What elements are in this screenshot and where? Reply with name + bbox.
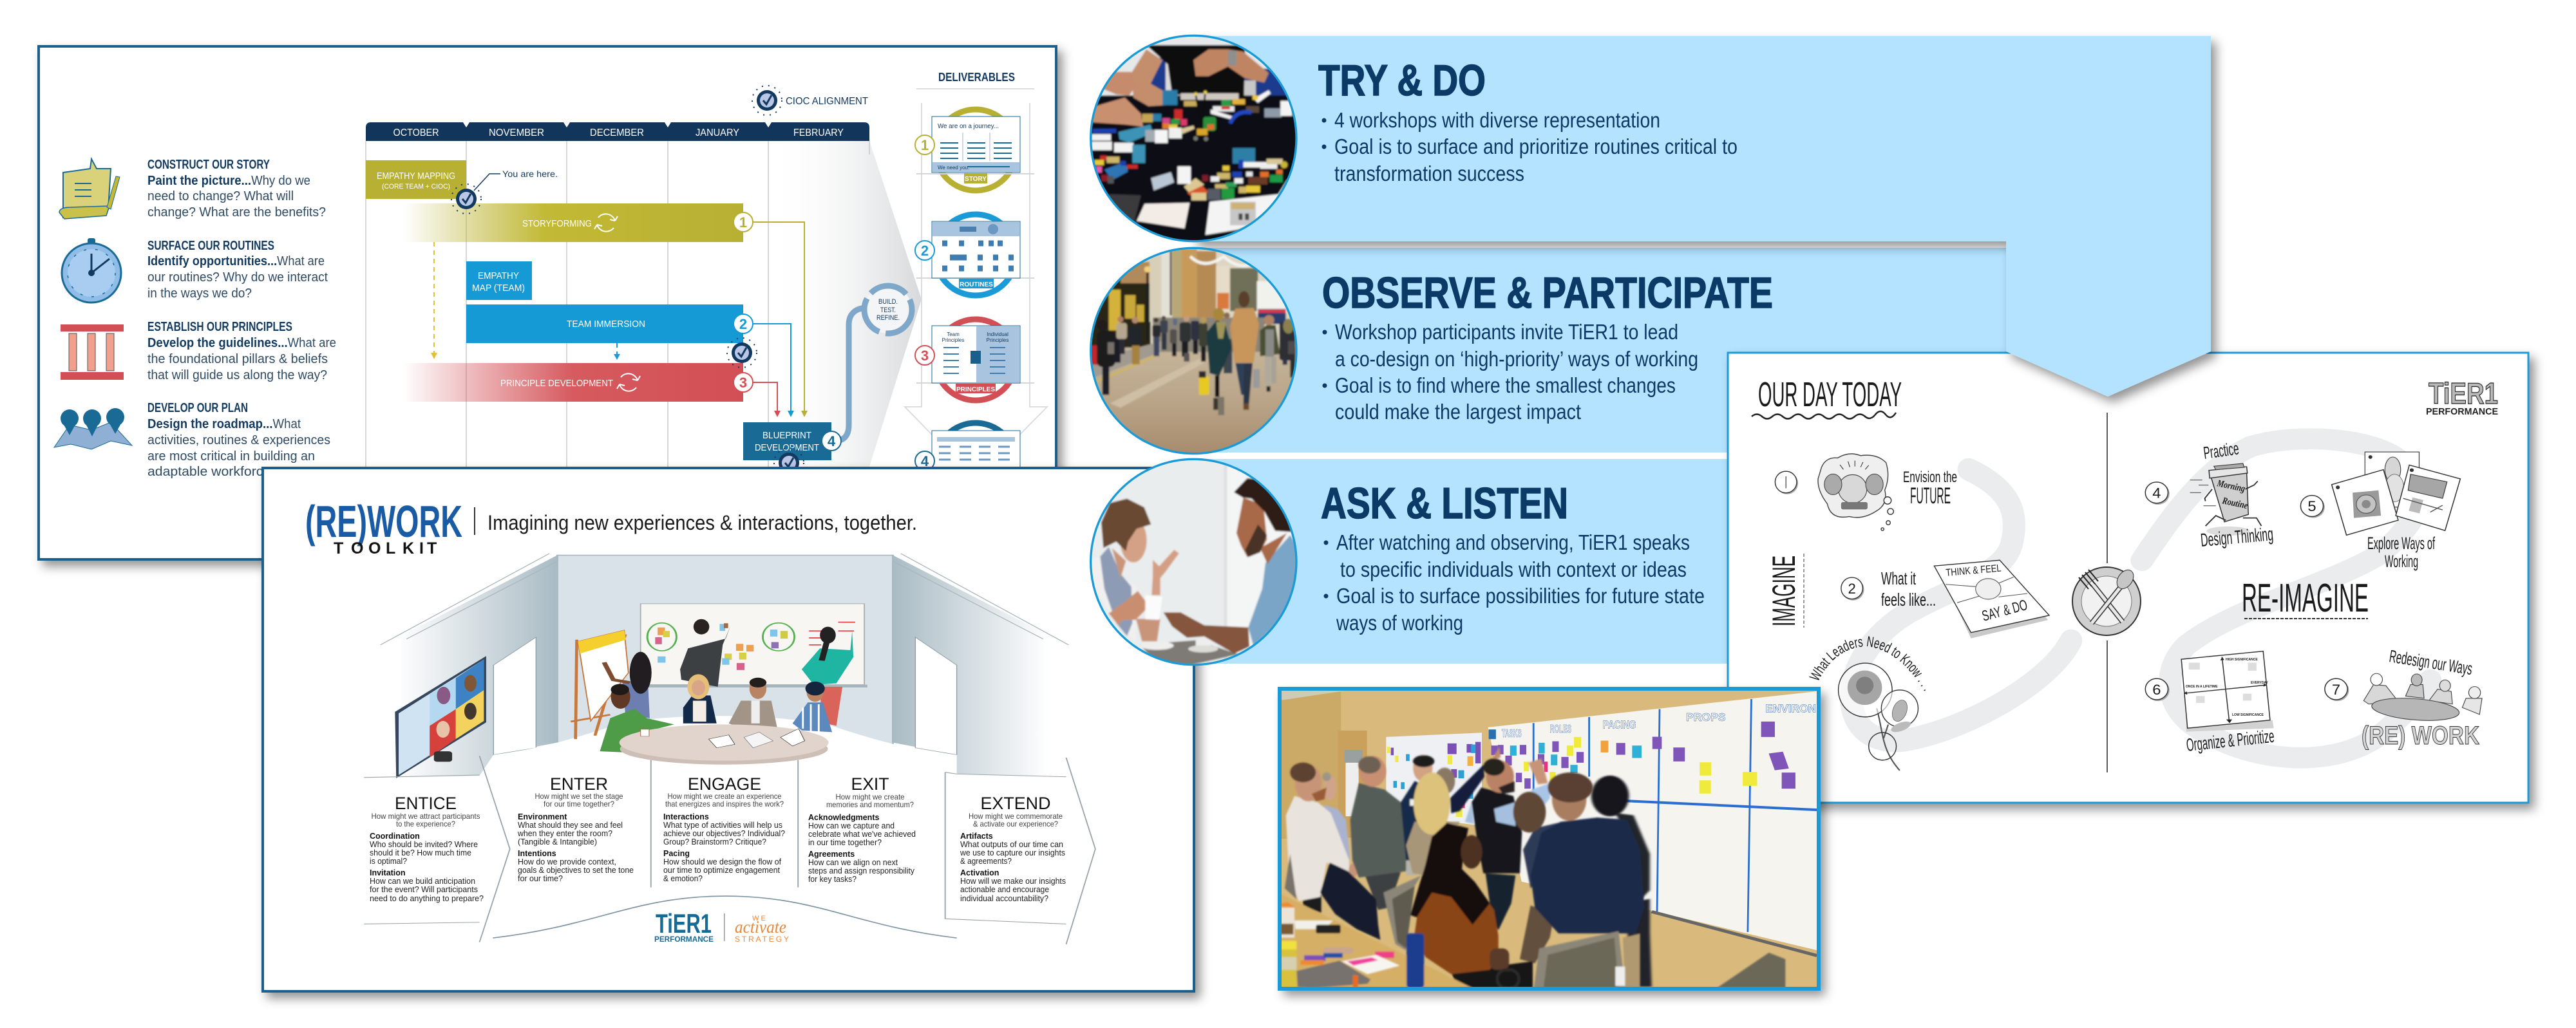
icon: rose (1839, 663, 1918, 771)
panel: workshop photo (1278, 687, 1820, 990)
chart: month column lines (366, 141, 869, 467)
section: enter: (Tangible & Intangible) (518, 837, 597, 846)
section: extend: we use to capture our insights (960, 848, 1065, 857)
cycle: build test refine: BUILD. (878, 298, 898, 306)
bullets: observe and participate: Goal is to find where the smallest changes (1335, 373, 1676, 397)
section: extend (960, 794, 1066, 903)
table (620, 724, 828, 765)
section: engage: Interactions (663, 812, 709, 821)
person: grey-haired arm raised (1434, 747, 1501, 813)
icon: crystal ball in thought cloud (1818, 454, 1893, 530)
photo background: wall and whiteboards (1280, 689, 1818, 989)
chart header: months: OCTOBER (393, 127, 439, 138)
text block: develop our plan (147, 401, 330, 479)
badge: cioc check february (774, 448, 804, 478)
cycle: build test refine: TEST. (880, 306, 896, 314)
text block: establish our principles: Develop the guidelines...What are (147, 336, 336, 350)
text: matrix labels: LOW SIGNIFICANCE (2232, 713, 2264, 717)
text: explore ways of working: Explore Ways of (2367, 534, 2435, 553)
number 6: 6 (2152, 682, 2161, 698)
cycle: build test refine: REFINE. (876, 314, 900, 322)
icon: stopwatch (62, 238, 121, 303)
person: seated woman in rust top (1410, 823, 1533, 988)
callout: you are here: You are here. (502, 169, 558, 179)
section: entice: Coordination (370, 832, 420, 841)
sketches: cup, cards, matrix, table (2145, 452, 2482, 732)
number 4 (2145, 482, 2170, 505)
text block: construct our story (147, 158, 326, 220)
logo: tier1 performance: WE (752, 915, 768, 922)
legend: cioc alignment (752, 86, 868, 115)
card: principles deliverable: Individual (987, 332, 1009, 337)
section: extend: EXTEND (980, 794, 1051, 813)
section: engage: & emotion? (663, 874, 703, 883)
box: blueprint development: BLUEPRINT (762, 430, 811, 441)
section: entice: for the event? Will participants (370, 885, 478, 894)
section: enter: for our time? (518, 874, 563, 883)
section: engage: ENGAGE (688, 774, 761, 794)
number badges: 1 to 4: 3 (739, 375, 747, 391)
card: blueprint deliverable (915, 423, 1020, 504)
box: blueprint development: DEVELOPMENT (755, 442, 819, 453)
arrows: dashed dependencies (434, 242, 617, 355)
section: engage (663, 774, 785, 883)
section: extend: Activation (960, 868, 999, 877)
section: exit: celebrate what we've achieved (808, 830, 916, 839)
text: matrix labels: HIGH SIGNIFICANCE (2226, 658, 2258, 662)
text block: surface our routines: SURFACE OUR ROUTINES (147, 239, 274, 253)
section: exit (808, 774, 916, 884)
bar: storyforming: STORYFORMING (522, 218, 592, 229)
number badges: 1 to 4: 2 (739, 316, 747, 332)
heading: deliverables: DELIVERABLES (938, 71, 1015, 84)
text: explore ways of working (2367, 534, 2435, 571)
card: principles deliverable: Principles (942, 337, 964, 343)
photo frame (1280, 689, 1819, 989)
section: enter: ENTER (550, 774, 608, 794)
logo: tier1 performance (654, 908, 789, 944)
chevron: wedge toward deliverables (836, 141, 921, 467)
whiteboard headings: TASKS (1502, 727, 1522, 740)
text: what it feels like (1881, 568, 1936, 610)
icon: running coffee cup (2190, 463, 2262, 536)
chart header: months: DECEMBER (590, 127, 644, 138)
text: morning routine on cup: Routine (2221, 496, 2249, 511)
room walls (381, 554, 1068, 778)
bar: empathy mapping (366, 160, 466, 199)
section: entice: should it be? How much time (370, 848, 471, 857)
label: imagine: IMAGINE (1766, 556, 1802, 626)
card: principles deliverable: PRINCIPLES (956, 386, 995, 393)
whiteboard headings: ENVIRON (1765, 702, 1816, 715)
text block: develop our plan: adaptable workforce? (147, 465, 278, 479)
section: extend: How might we commemorate (969, 812, 1063, 821)
logo: tier1 performance: STRATEGY (735, 935, 789, 944)
section: engage: achieve our objectives? Individual? (663, 829, 785, 838)
text: think feel say do (1946, 563, 2029, 624)
sketches: crystal ball, paper, rose (1775, 453, 2050, 771)
bullets: try and do (1321, 108, 1738, 185)
section: engage: Pacing (663, 849, 690, 858)
label: what leaders need to know: What Leaders Need to Know . . . (1809, 636, 1926, 691)
text block: develop our plan: Design the roadmap...What (147, 417, 301, 431)
text block: establish our principles: ESTABLISH OUR PRINCIPLES (147, 320, 292, 334)
text block: construct our story: CONSTRUCT OUR STORY (147, 158, 270, 172)
number 1 (1775, 471, 1798, 494)
text: morning routine on cup: Morning (2215, 478, 2246, 494)
card: routines deliverable (915, 214, 1034, 295)
panel: rework toolkit (263, 468, 1194, 991)
bar: principle development: PRINCIPLE DEVELOPMENT (500, 378, 613, 389)
person: man in black vest (1465, 758, 1522, 930)
bar: empathy mapping: EMPATHY MAPPING (377, 171, 455, 182)
box: empathy map team (466, 261, 532, 300)
arrowheads: bars to blueprint (774, 411, 808, 417)
text: practice: Practice (2202, 439, 2240, 463)
number 2: 2 (1848, 581, 1856, 597)
section: entice (370, 794, 484, 903)
section: enter: How might we set the stage (535, 792, 623, 801)
section: enter: for our time together? (544, 799, 614, 808)
bullets: observe and participate: could make the largest impact (1335, 400, 1581, 424)
logo: rework sketch: (RE) WORK (2362, 722, 2479, 750)
logo: rework toolkit: (RE)WORK (305, 496, 462, 547)
logo: tier1 sketch: TiER1 (2429, 377, 2498, 410)
section: entice: to the experience? (396, 819, 455, 828)
section: extend: & agreements? (960, 857, 1012, 866)
bar: storyforming (403, 203, 743, 242)
bullets: try and do: transformation success (1334, 162, 1524, 185)
whiteboard headings: ROLES (1549, 723, 1571, 736)
person: man in green sweater (600, 684, 674, 753)
section: extend: individual accountability? (960, 894, 1048, 903)
photo circle: two people talking (1088, 456, 1301, 668)
section: engage: our time to optimize engagement (663, 866, 781, 875)
chart header: months: JANUARY (696, 127, 739, 138)
text: what it feels like: feels like... (1881, 590, 1936, 610)
number 6 (2145, 678, 2170, 701)
bullets: try and do: Goal is to surface and prioritize routines critical to (1334, 135, 1738, 158)
box: blueprint development (743, 422, 831, 460)
text block: develop our plan: are most critical in building an (147, 449, 315, 463)
whiteboard surfaces (1488, 691, 1817, 956)
logo: tier1 sketch: PERFORMANCE (2426, 406, 2498, 417)
card: story deliverable: We need you. (938, 165, 969, 171)
heading: re-imagine: RE-IMAGINE (2242, 576, 2369, 621)
whiteboard headings: PROPS (1686, 711, 1726, 724)
heading: observe and participate: OBSERVE & PARTICIPATE (1322, 268, 1773, 317)
sticky notes (1492, 722, 1795, 794)
photo circle: busy street (1088, 245, 1301, 457)
person: standing man at board (680, 619, 730, 687)
box: empathy map team: EMPATHY (478, 270, 519, 281)
section: entice: Who should be invited? Where (370, 840, 478, 849)
number 5 (2300, 496, 2325, 518)
connector: blueprint to build test refine (835, 308, 866, 441)
column: deliverables arrow outline (905, 89, 1047, 480)
logo: rework toolkit: TOOLKIT (334, 539, 437, 557)
section: entice: Invitation (370, 868, 406, 877)
section: enter: goals & objectives to set the tone (518, 866, 634, 875)
number 5: 5 (2307, 498, 2316, 514)
person: man in grey fleece (1350, 756, 1412, 910)
text: envision the future (1903, 469, 1957, 509)
text block: construct our story: need to change? What will (147, 189, 294, 203)
section: exit: memories and momentum? (826, 800, 914, 809)
icon: ways of working cards (2332, 452, 2460, 535)
section: engage: Group? Brainstorm? Critique? (663, 837, 766, 846)
text: design thinking: Design Thinking (2200, 524, 2274, 551)
entice and extend chevrons and dividers (364, 756, 1095, 944)
text: envision the future: FUTURE (1910, 483, 1951, 509)
number 4: 4 (2152, 485, 2161, 501)
number badges: 1 to 4: 4 (828, 433, 836, 449)
section: exit: Agreements (808, 850, 855, 859)
panel: roadmap process chart (39, 46, 1056, 559)
bullets: ask and listen: ways of working (1336, 611, 1463, 635)
number 2 (1841, 577, 1864, 601)
section: enter: What should they see and feel (518, 821, 623, 830)
text block: develop our plan: activities, routines & experiences (147, 433, 330, 447)
video conference screen (395, 656, 486, 778)
panel: try and do banner with arrow (1193, 36, 2211, 397)
icon: think feel say do paper (1934, 560, 2049, 639)
card: story deliverable (915, 109, 1034, 191)
text block: construct our story: change? What are the benefits? (147, 205, 326, 220)
card: story deliverable: STORY (965, 176, 987, 183)
section: entice: How might we attract participants (371, 812, 480, 821)
person: man with glasses (729, 678, 777, 729)
card: principles deliverable: Principles (987, 337, 1009, 343)
whiteboard headings (1502, 702, 1816, 740)
bullets: ask and listen: Goal is to surface possibilities for future state (1336, 584, 1705, 608)
badge: cioc check october (451, 184, 481, 214)
icon: people at rework table (2363, 673, 2482, 724)
photo foreground: people, chairs, table (1280, 747, 1785, 988)
text: matrix labels (2186, 658, 2269, 717)
box: empathy map team: MAP (TEAM) (472, 283, 525, 294)
easel (571, 630, 629, 739)
text: morning routine on cup (2215, 478, 2249, 511)
section: exit: How might we create (836, 792, 905, 801)
section: entice: How can we build anticipation (370, 877, 475, 886)
section: enter: Intentions (518, 849, 556, 858)
text block: establish our principles: the foundational pillars & beliefs (147, 352, 328, 366)
section: entice: is optimal? (370, 857, 407, 866)
logo: rework toolkit (305, 496, 475, 557)
text: think feel say do: THINK & FEEL (1946, 563, 2002, 579)
section: enter: Environment (518, 812, 567, 821)
swirl: right infinity loop (2142, 439, 2430, 758)
bullets: ask and listen: to specific individuals with context or ideas (1340, 557, 1687, 581)
label: imagine (1766, 554, 1804, 628)
heading: ask and listen: ASK & LISTEN (1321, 479, 1568, 528)
section: exit: Acknowledgments (808, 813, 879, 822)
text block: surface our routines: Identify opportunities...What are (147, 254, 325, 268)
text: think feel say do: SAY & DO (1980, 596, 2029, 624)
section: exit: in our time together? (808, 838, 882, 847)
person: woman with short brown hair (1513, 792, 1563, 888)
person: man in white shirt (1286, 763, 1358, 913)
bullets: ask and listen: After watching and observing, TiER1 speaks (1336, 530, 1690, 554)
section: entice: need to do anything to prepare? (370, 894, 484, 903)
chart header: months (366, 122, 869, 141)
logo: tier1 sketch (2426, 377, 2498, 417)
section: enter: How do we provide context, (518, 857, 616, 866)
whiteboard (638, 604, 867, 687)
bullets: ask and listen (1324, 530, 1705, 635)
section: extend: How will we make our insights (960, 877, 1066, 886)
card: blueprint deliverable: 4 (921, 453, 929, 469)
section: engage: What type of activities will help us (663, 821, 782, 830)
number 7 (2325, 678, 2349, 701)
bar: empathy mapping: (CORE TEAM + CIOC) (382, 183, 450, 191)
section: engage: How might we create an experience (667, 792, 782, 801)
section: exit: steps and assign responsibility (808, 866, 915, 875)
section: exit: How can we capture and (808, 821, 895, 830)
number badges: 1 to 4: 1 (739, 214, 747, 230)
bullets: observe and participate (1323, 320, 1698, 424)
wall charts (1386, 733, 1482, 826)
logo: tier1 performance: PERFORMANCE (654, 936, 714, 944)
cycle: build test refine (864, 286, 912, 333)
card: story deliverable: We are on a journey... (938, 122, 999, 130)
whiteboard headings: PACING (1603, 718, 1636, 731)
logo: tier1 performance: TiER1 (656, 908, 712, 939)
card: routines deliverable: ROUTINES (960, 281, 993, 288)
person: blonde woman (1406, 772, 1460, 875)
callout: you are here (474, 169, 558, 191)
card: principles deliverable: 3 (921, 348, 929, 364)
person: blonde woman (683, 674, 717, 724)
card: principles deliverable (915, 319, 1034, 400)
card: principles deliverable: Team (947, 332, 960, 337)
bar: principle development (403, 363, 743, 402)
text: what it feels like: What it (1881, 568, 1916, 588)
swirl: left infinity loop (1852, 469, 2071, 741)
panel: ask and listen banner (1193, 459, 2006, 664)
person: young man in navy sweater (1520, 772, 1644, 988)
table and objects (1280, 893, 1519, 988)
person: woman with teal top (802, 627, 853, 726)
text block: establish our principles (147, 320, 336, 382)
text block: develop our plan: DEVELOP OUR PLAN (147, 401, 248, 415)
icon: story scroll (59, 159, 120, 219)
arrows: bars to blueprint (752, 222, 804, 412)
photo circle: hands building with lego (1088, 32, 1301, 246)
bullets: try and do: 4 workshops with diverse representation (1334, 108, 1660, 132)
person: man in navy back (1401, 755, 1434, 875)
text block: surface our routines: in the ways we do? (147, 286, 252, 301)
person: woman striped shirt (793, 682, 832, 732)
section: exit: for key tasks? (808, 875, 857, 884)
icon: map with pins (54, 408, 132, 449)
section: extend: What outputs of our time can (960, 840, 1063, 849)
text block: surface our routines (147, 239, 328, 301)
card: routines deliverable: 2 (921, 243, 929, 259)
person: woman with long dark hair (1591, 776, 1652, 987)
icon: pillars (61, 324, 124, 380)
floor (493, 716, 957, 778)
chairs and jacket (1285, 854, 1785, 988)
heading: our day today (1752, 375, 1902, 418)
bar: team immersion (466, 304, 743, 343)
number 7: 7 (2332, 682, 2340, 698)
heading: tagline: Imagining new experiences & interactions, together. (488, 511, 917, 534)
section: exit: EXIT (851, 774, 889, 794)
section: engage: that energizes and inspires the work? (665, 799, 784, 808)
panel: observe and participate banner (1193, 248, 2006, 453)
section: extend: actionable and encourage (960, 885, 1049, 894)
section: exit: How can we align on next (808, 858, 898, 867)
number badges: 1 to 4 (734, 212, 841, 451)
section: entice: ENTICE (395, 794, 457, 813)
text block: establish our principles: that will guide us along the way? (147, 368, 327, 382)
chart header: months: NOVEMBER (489, 127, 544, 138)
chart header: months: FEBRUARY (793, 127, 844, 138)
heading: our day today: OUR DAY TODAY (1758, 375, 1902, 414)
heading: try and do: TRY & DO (1318, 56, 1486, 105)
section: enter: when they enter the room? (517, 829, 612, 838)
section: enter (517, 774, 634, 883)
legend: cioc alignment: CIOC ALIGNMENT (786, 96, 868, 107)
text: redesign our ways: Redesign our Ways (2388, 646, 2474, 678)
bullets: observe and participate: Workshop participants invite TiER1 to lead (1335, 320, 1678, 344)
section: engage: How should we design the flow of (663, 857, 782, 866)
text: matrix labels: EVERYDAY (2251, 681, 2269, 685)
logo: tier1 performance: activate (735, 917, 786, 937)
text block: construct our story: Paint the picture...Why do we (147, 174, 310, 188)
badge: cioc check january (727, 338, 757, 368)
text: envision the future: Envision the (1903, 469, 1957, 486)
icon: prioritization matrix (2181, 651, 2274, 732)
text block: surface our routines: our routines? Why do we interact (147, 270, 328, 285)
panel: our day today sketch (1725, 350, 2541, 816)
text: organize and prioritize: Organize & Prioritize (2185, 726, 2275, 755)
bar: team immersion: TEAM IMMERSION (567, 319, 645, 330)
section: extend: Artifacts (960, 832, 993, 841)
illustration: meeting room (364, 554, 1095, 944)
arrowheads: dashed dependencies (431, 353, 620, 360)
person: woman behind with glasses (1322, 772, 1350, 861)
icon: plate with fork and spoon (2072, 567, 2141, 635)
card: story deliverable: 1 (921, 137, 929, 153)
section: extend: & activate our experience? (973, 819, 1058, 828)
person: raised arm in blue shirt (1528, 758, 1550, 809)
bullets: observe and participate: a co-design on ‘high-priority’ ways of working (1335, 347, 1698, 371)
text: explore ways of working: Working (2385, 552, 2418, 571)
person: woman at easel (604, 652, 652, 718)
text: matrix labels: ONCE IN A LIFETIME (2186, 685, 2218, 689)
